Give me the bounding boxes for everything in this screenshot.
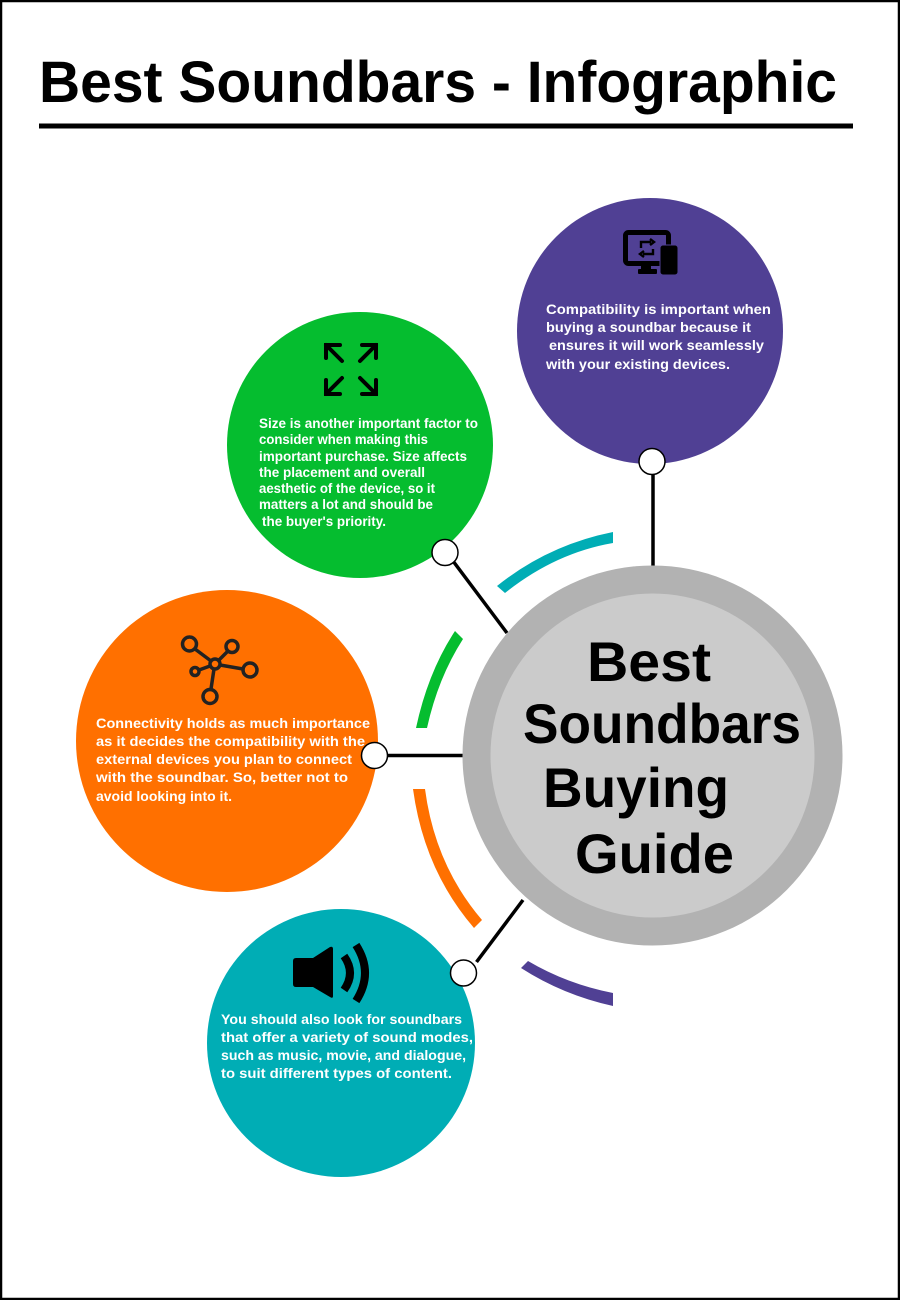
text: size: matters a lot and should be [259, 497, 433, 512]
panel: sound modes [207, 909, 475, 1177]
panel: compatibility [517, 198, 783, 464]
text: size [259, 416, 478, 529]
text: size: aesthetic of the device, so it [259, 481, 435, 496]
text: size: Size is another important factor to [259, 416, 478, 431]
text: connectivity: avoid looking into it. [96, 789, 232, 804]
text: sound modes: that offer a variety of sound modes, [221, 1030, 473, 1045]
title: Best Soundbars - Infographic [39, 50, 837, 115]
text: sound modes: You should also look for soundbars [221, 1012, 462, 1027]
text: connectivity: external devices you plan to connect [96, 752, 353, 767]
text: connectivity [95, 716, 371, 804]
text: sound modes: to suit different types of content. [221, 1066, 452, 1081]
arc: green [416, 631, 463, 728]
central heading: Soundbars [523, 692, 801, 755]
icon: speaker [293, 945, 365, 1001]
node markers [362, 448, 665, 986]
text: sound modes [221, 1012, 473, 1081]
panel: size [227, 312, 493, 578]
central circle [462, 566, 842, 946]
text: compatibility: Compatibility is important when [546, 302, 771, 317]
text: connectivity: with the soundbar. So, better not to [95, 770, 348, 785]
text: compatibility [545, 302, 771, 372]
text: connectivity: Connectivity holds as much importance [96, 716, 371, 731]
text: compatibility: ensures it will work seamlessly [549, 338, 765, 353]
arc: purple [521, 961, 613, 1006]
central heading [523, 630, 801, 885]
text: connectivity: as it decides the compatibility with the [96, 734, 366, 749]
central heading: Buying [543, 756, 729, 819]
arc: teal [497, 532, 613, 593]
text: compatibility: with your existing devices. [545, 357, 730, 372]
arc: orange [413, 789, 482, 928]
icon: expand arrows [326, 345, 376, 394]
central heading: Best [587, 630, 711, 693]
text: size: consider when making this [259, 432, 428, 447]
panel: connectivity [76, 590, 378, 892]
icon: monitor and phone [626, 232, 678, 275]
connector lines [380, 470, 653, 962]
text: size: the placement and overall [259, 465, 425, 480]
text: sound modes: such as music, movie, and dialogue, [221, 1048, 466, 1063]
text: compatibility: buying a soundbar because it [546, 320, 752, 335]
central heading: Guide [575, 822, 734, 885]
text: size: the buyer's priority. [262, 514, 386, 529]
icon: network nodes [182, 637, 257, 704]
text: size: important purchase. Size affects [259, 449, 467, 464]
